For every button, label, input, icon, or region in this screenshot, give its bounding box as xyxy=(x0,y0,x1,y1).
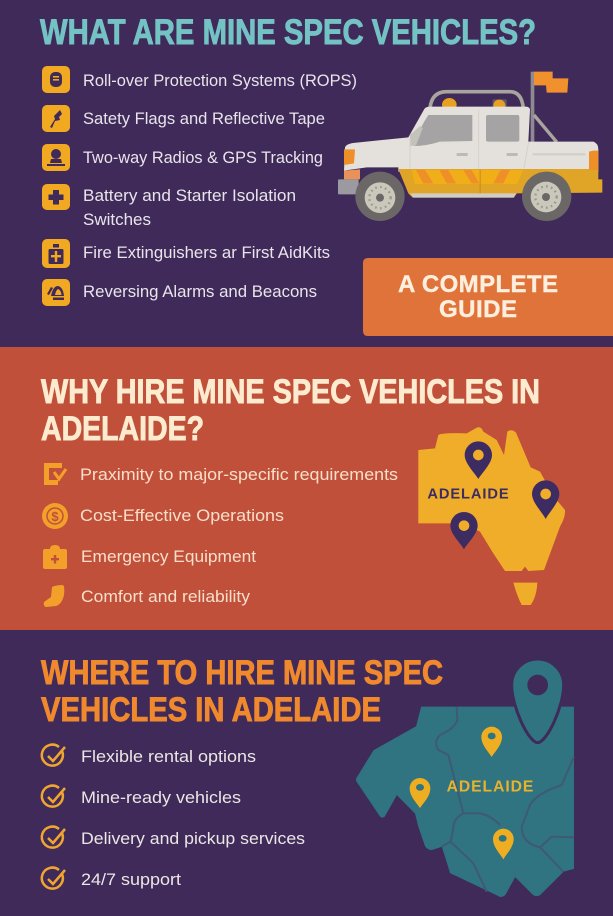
icon: roll-over protection xyxy=(42,66,70,93)
icon: seat xyxy=(44,585,64,607)
item: cost: Cost-Effective Operations xyxy=(80,507,284,525)
map: south australia region xyxy=(357,659,574,896)
icon: safety flag xyxy=(42,105,70,132)
mainland xyxy=(418,427,565,571)
heading: where to hire: WHERE TO HIRE MINE SPEC xyxy=(41,654,443,692)
feature list xyxy=(42,66,357,306)
large pin xyxy=(512,659,564,743)
item: battery isolation: Battery and Starter Isolation xyxy=(83,187,296,205)
heading: why hire: ADELAIDE? xyxy=(41,410,204,448)
icon: check two xyxy=(42,786,65,807)
pin: south xyxy=(450,512,478,549)
item: alarms: Reversing Alarms and Beacons xyxy=(83,283,317,301)
item: proximity: Praximity to major-specific requirements xyxy=(80,466,398,484)
item: radios: Two-way Radios & GPS Tracking xyxy=(83,149,323,167)
icon: cost coin xyxy=(42,503,68,529)
pin: east xyxy=(532,480,559,519)
panel: what are mine spec vehicles xyxy=(0,0,613,347)
item: flags: Satety Flags and Reflective Tape xyxy=(83,110,325,128)
item: rops: Roll-over Protection Systems (ROPS) xyxy=(83,72,357,90)
icon: check four xyxy=(42,868,65,889)
icon: first aid kit xyxy=(42,239,70,268)
rear wheel xyxy=(522,172,571,221)
icon: checklist xyxy=(44,463,66,485)
item: flexible rental: Flexible rental options xyxy=(81,748,256,766)
flag and pole xyxy=(531,72,568,142)
icon: check one xyxy=(42,745,65,766)
icon: emergency kit xyxy=(43,545,67,569)
item: extinguishers: Fire Extinguishers ar First AidKits xyxy=(83,244,330,262)
ute body xyxy=(338,107,602,198)
pin: west xyxy=(410,778,430,808)
pin: north xyxy=(481,727,502,757)
map label: ADELAIDE xyxy=(447,778,533,795)
icon: reversing beacon xyxy=(42,279,70,306)
icon: cost coin: $ xyxy=(51,509,59,524)
heading: why hire xyxy=(41,373,540,448)
callout: a complete guide: GUIDE xyxy=(439,296,517,323)
front wheel xyxy=(355,172,405,221)
heading: where to hire xyxy=(41,654,443,729)
pin: north xyxy=(465,441,492,479)
item: delivery: Delivery and pickup services xyxy=(81,830,305,848)
pin: south xyxy=(493,829,514,859)
callout: a complete guide xyxy=(363,258,613,336)
tasmania xyxy=(513,583,537,605)
illustration: mine spec ute xyxy=(338,72,602,221)
icon: radio operator xyxy=(42,144,70,171)
map label: ADELAIDE xyxy=(427,487,509,503)
heading: where to hire: VEHICLES IN ADELAIDE xyxy=(41,691,381,729)
heading: why hire: WHY HIRE MINE SPEC VEHICLES IN xyxy=(41,373,540,411)
roll bar and beacons xyxy=(430,92,523,111)
callout: a complete guide: A COMPLETE xyxy=(398,271,558,298)
region shape xyxy=(357,707,573,896)
icon: check three xyxy=(42,827,65,848)
item: support: 24/7 support xyxy=(81,871,181,889)
item: battery isolation: Switches xyxy=(83,211,151,229)
icon: battery plus xyxy=(42,184,70,210)
item: battery isolation xyxy=(83,187,296,229)
panel: why hire in adelaide xyxy=(0,347,613,630)
item: mine-ready: Mine-ready vehicles xyxy=(81,789,241,807)
panel: where to hire xyxy=(0,630,613,916)
item: comfort: Comfort and reliability xyxy=(81,588,251,606)
map: australia with pins xyxy=(418,427,565,605)
item: emergency: Emergency Equipment xyxy=(81,548,256,566)
